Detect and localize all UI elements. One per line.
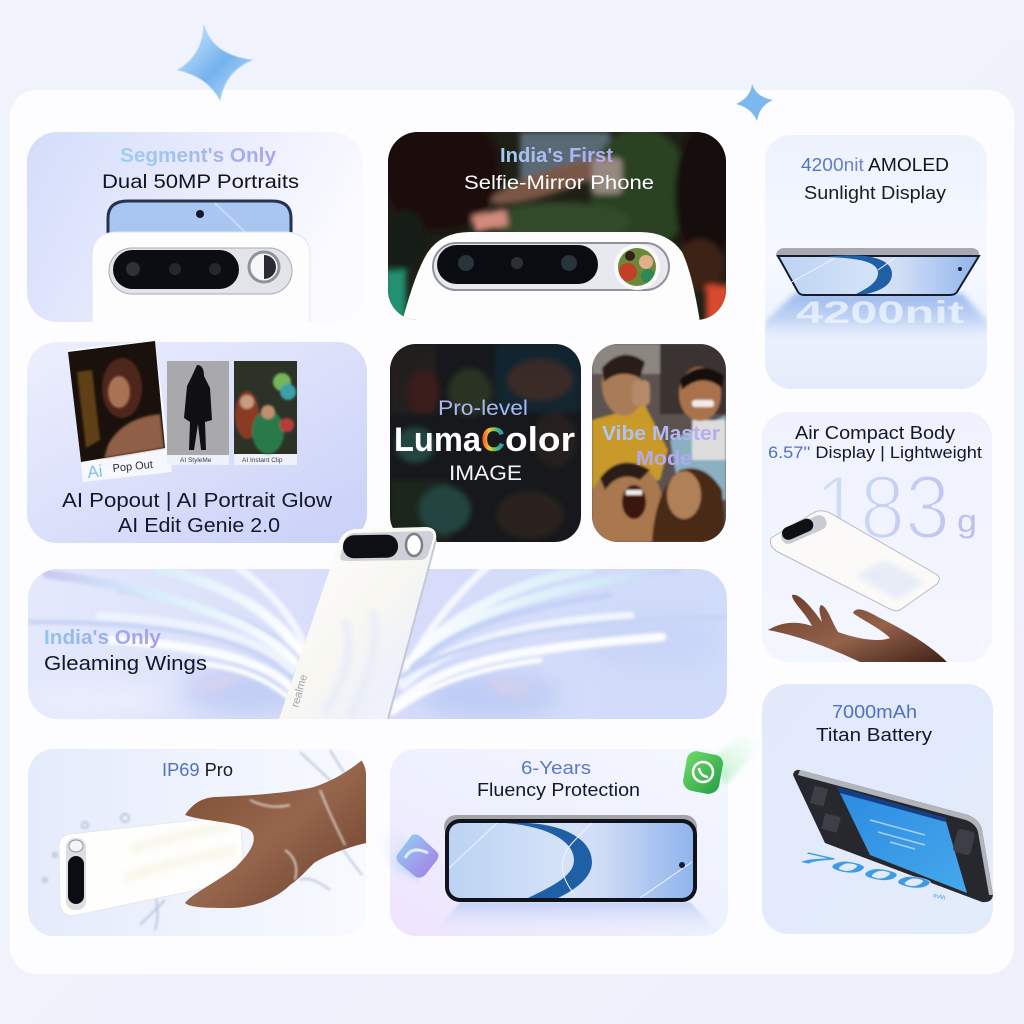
- icon: large sparkle star: [178, 25, 252, 100]
- heading: 4200nit AMOLED: 4200nit AMOLED: [801, 155, 949, 175]
- heading: mode: Mode: [636, 448, 692, 470]
- weight: 183g: g: [957, 503, 977, 539]
- heading: india's only: India's Only: [44, 627, 162, 649]
- text: gleaming wings: Gleaming Wings: [44, 653, 207, 675]
- hand gripping phone: [185, 757, 366, 908]
- photo card: AI pop out: Pop Out: [112, 459, 153, 475]
- heading: IP69 pro: IP69 Pro: [162, 760, 233, 780]
- phone: white back with camera: [92, 232, 310, 322]
- icon: whatsapp app cube: [683, 733, 762, 794]
- icon: small sparkle star: [736, 84, 773, 121]
- text: sunlight display: Sunlight Display: [804, 183, 946, 203]
- heading: 6-years: 6-Years: [521, 758, 591, 778]
- phone reflection: [446, 901, 706, 922]
- text: selfie-mirror phone: Selfie-Mirror Phone: [464, 173, 654, 194]
- phone: central pearl back: realme: [289, 673, 310, 709]
- right wing: [390, 569, 678, 716]
- photo card: AI instant clip: [234, 361, 297, 465]
- callout: 7000mAh italic: mAh: [933, 893, 946, 902]
- panel: selfie-mirror phone photo: [388, 132, 726, 320]
- reflection with 4200nit: 4200nit: [796, 295, 964, 330]
- soft shading under wings: [82, 626, 690, 719]
- heading: segment's only: Segment's Only: [120, 145, 277, 167]
- panel: air compact body: [762, 412, 992, 662]
- weight: 183g: 183: [815, 458, 950, 558]
- photo card: AI pop out: Ai: [86, 462, 103, 482]
- left wing: [30, 566, 304, 697]
- panel: dual 50MP portraits: [27, 132, 363, 322]
- heading: air compact body: Air Compact Body: [795, 423, 955, 443]
- phone: white back with selfie mirror: [402, 232, 700, 322]
- phone: tilted back: [770, 511, 939, 611]
- panel: 6-years fluency protection: [390, 749, 728, 936]
- pink highlights: [194, 675, 535, 698]
- photo collage background: [390, 344, 581, 542]
- phone: front screen top: [108, 201, 291, 240]
- text: titan battery: Titan Battery: [816, 725, 932, 745]
- text: AI edit genie: AI Edit Genie 2.0: [118, 515, 280, 537]
- icon: game app cube: [372, 830, 438, 880]
- panel: IP69 pro: [28, 749, 366, 936]
- panel: LumaColor image: [390, 344, 581, 542]
- phone: front screen: [444, 815, 697, 902]
- phone: internal view with battery: [793, 770, 993, 902]
- panel: titan battery: [762, 684, 993, 934]
- text: LumaColor: Luma: [394, 421, 482, 459]
- phone: central pearl back: [279, 527, 436, 719]
- heading: vibe master: Vibe Master: [602, 423, 720, 445]
- heading: india's first: India's First: [500, 145, 613, 167]
- text: display and lightweight: 6.57'' Display | Lightweight: [768, 443, 982, 462]
- phone: white back in water: [59, 815, 245, 916]
- text: fluency protection: Fluency Protection: [477, 780, 640, 800]
- panel: 4200nit AMOLED sunlight display: [765, 135, 988, 389]
- text: dual 50MP portraits: Dual 50MP Portraits: [102, 172, 299, 193]
- text: LumaColor: olor: [505, 421, 575, 459]
- hand holding phone: [768, 595, 947, 662]
- photo card: AI StyleMe: AI StyleMe: [180, 457, 212, 464]
- phone: display edge view: [776, 248, 979, 295]
- water splash: [43, 750, 362, 930]
- photo card: AI StyleMe: [167, 361, 229, 465]
- text: IMAGE: IMAGE: [449, 462, 522, 485]
- reflection with 4200nit: [765, 290, 987, 334]
- photo background: trees and people: [388, 132, 726, 320]
- photo card: AI instant clip: AI Instant Clip: [242, 457, 283, 464]
- photo of friends: [592, 344, 726, 542]
- text: LumaColor: [396, 426, 574, 452]
- panel: vibe master mode: [592, 344, 726, 542]
- callout: 7000mAh italic: 7000: [788, 849, 941, 893]
- callout: 7000mAh italic: [788, 849, 946, 902]
- text: AI popout and portrait glow: AI Popout | AI Portrait Glow: [62, 490, 333, 512]
- panel: AI features: [27, 340, 367, 543]
- panel: gleaming wings: [28, 566, 727, 719]
- text: LumaColor: C: [481, 421, 505, 459]
- heading: 7000mAh: 7000mAh: [832, 702, 917, 722]
- photo card: AI pop out: [68, 340, 172, 482]
- heading: pro-level: Pro-level: [438, 397, 528, 420]
